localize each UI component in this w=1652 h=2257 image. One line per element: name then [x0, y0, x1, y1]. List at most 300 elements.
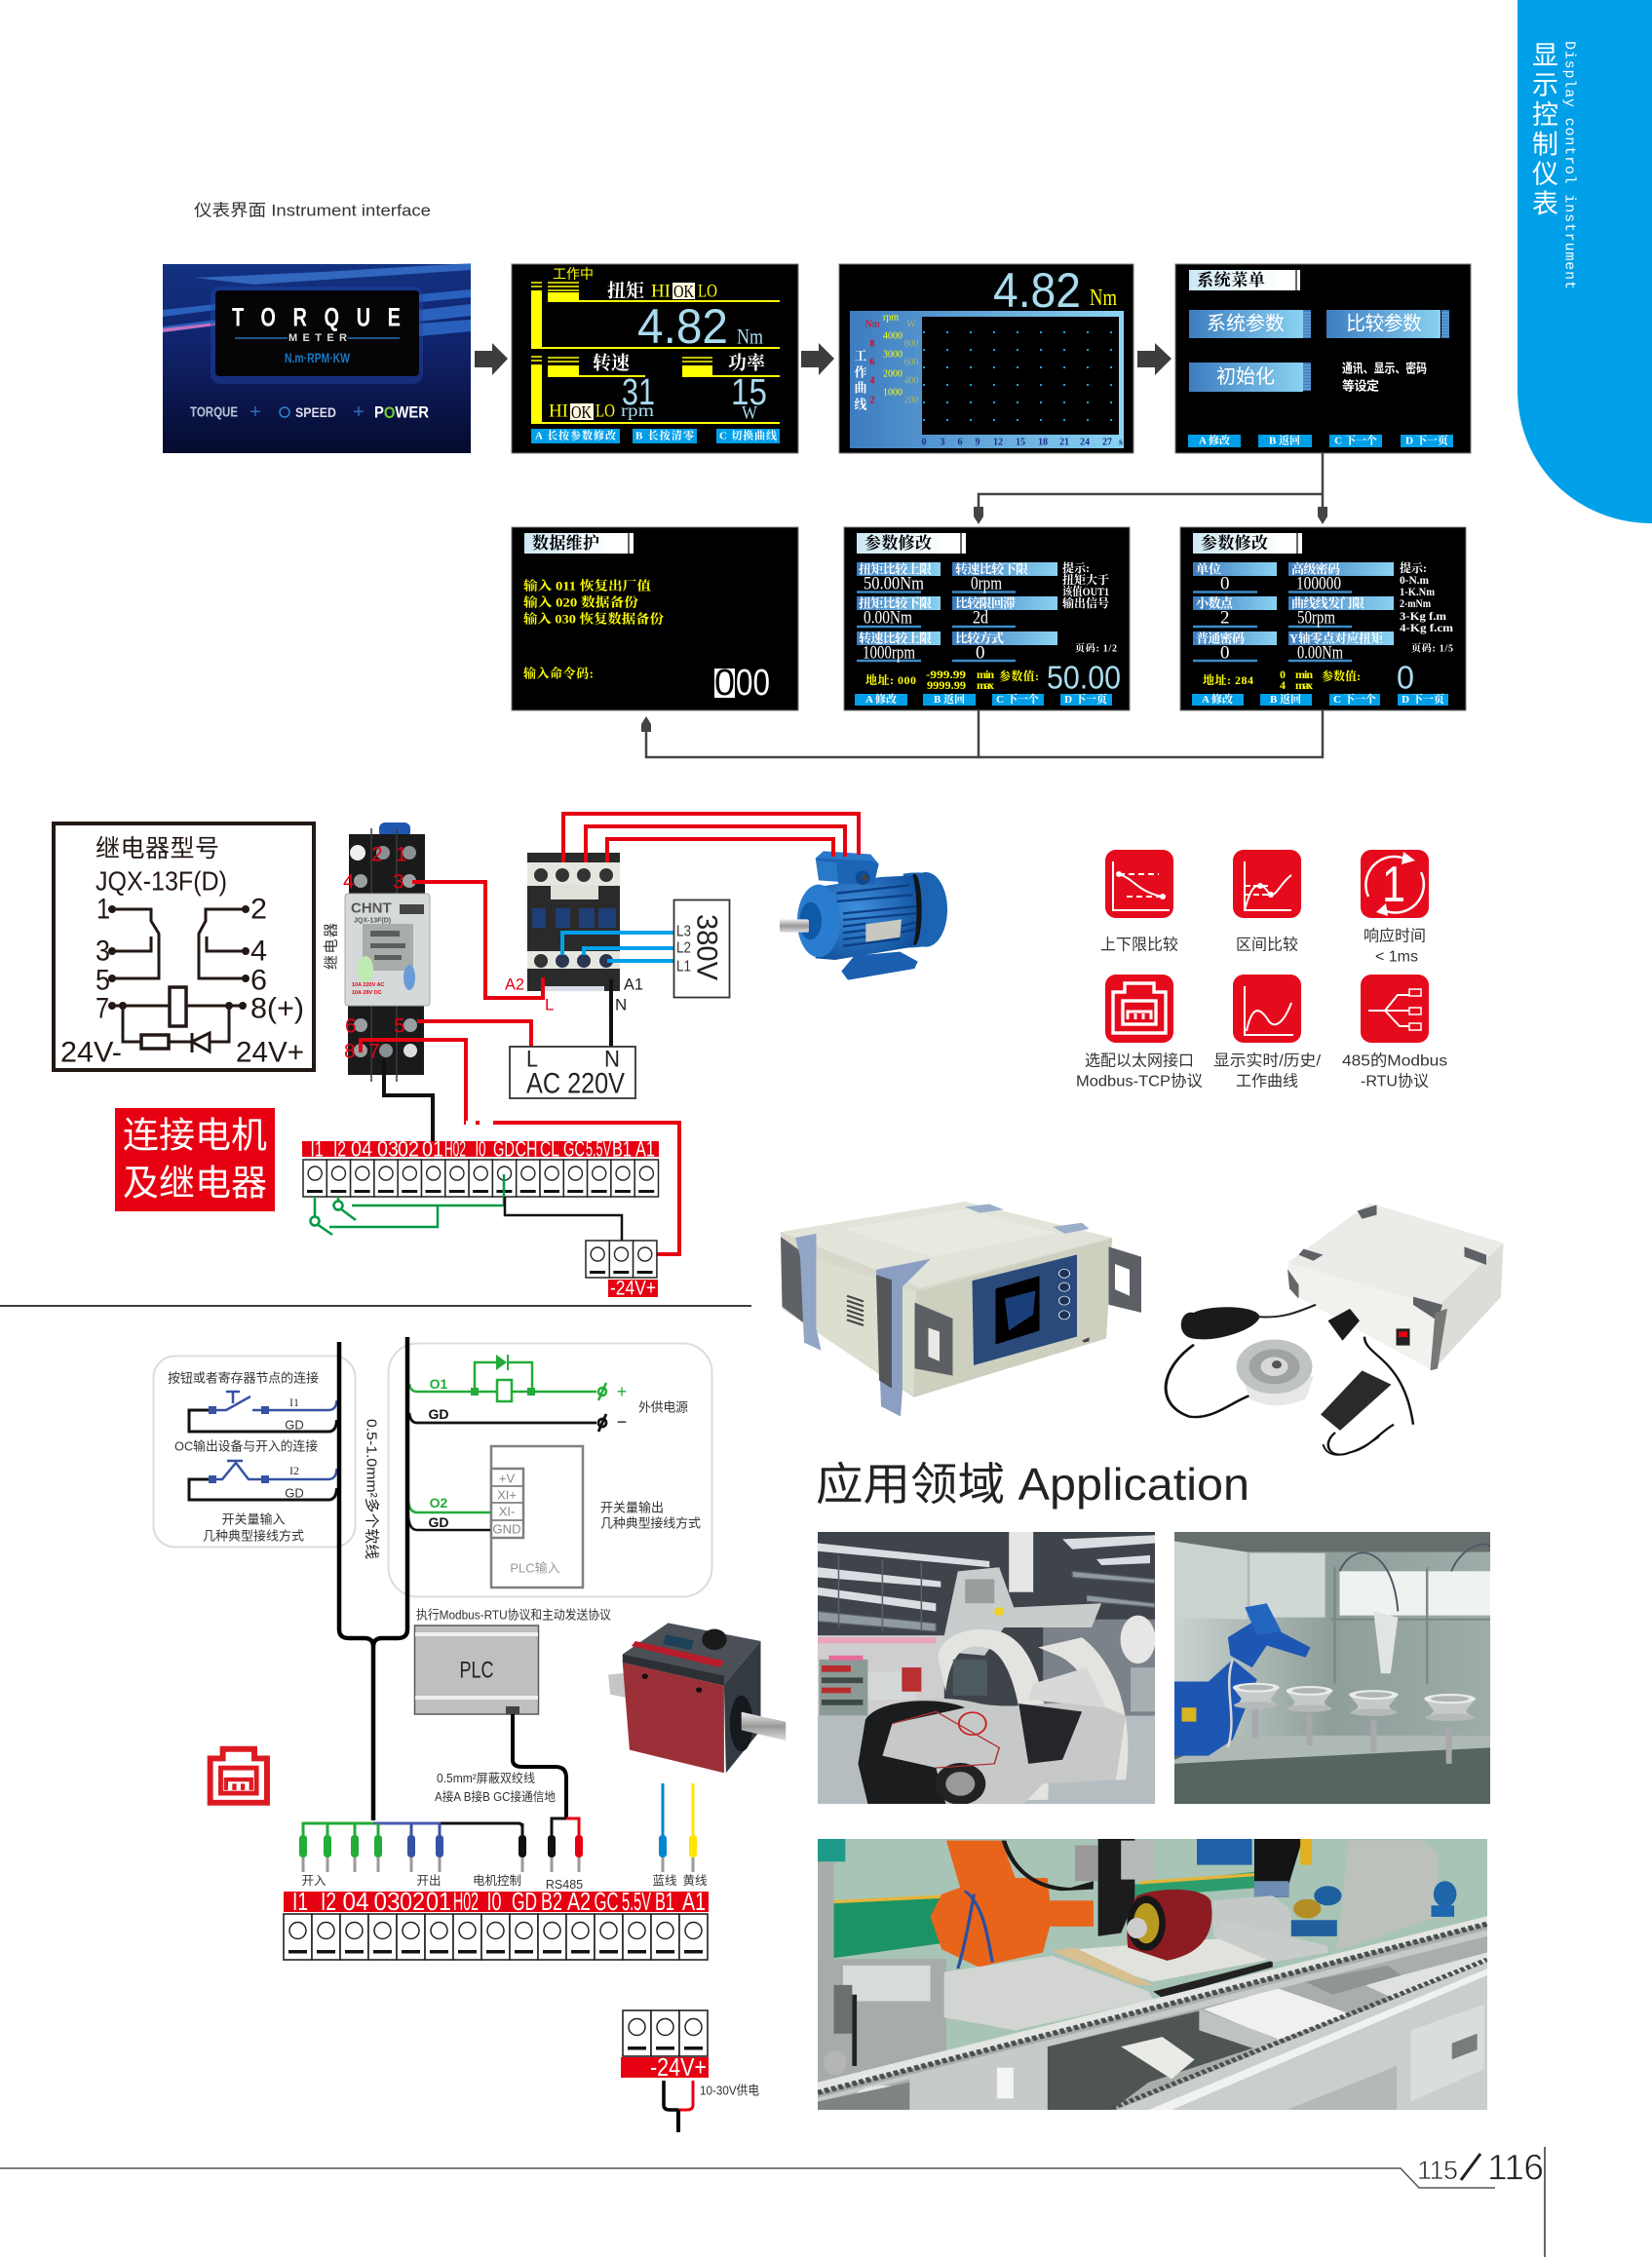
icon captions: 工作曲线	[1236, 1072, 1298, 1090]
photo: motor robot line	[818, 1839, 1487, 2110]
axis labels: 4	[869, 376, 875, 386]
icon: response time: 1	[1382, 857, 1405, 913]
screen: parameter edit page 5: 0-N.m	[1400, 573, 1429, 587]
terminal strip: motor wiring: CH	[515, 1136, 538, 1162]
relay photo: 6	[345, 1015, 357, 1037]
PLC unit	[415, 1626, 538, 1714]
screen: main readout: OK	[673, 282, 694, 301]
screen: parameter edit page 1: 提示:	[1062, 560, 1090, 575]
probe captions: 黄线	[682, 1874, 708, 1888]
AC 220V box: N	[604, 1047, 620, 1072]
terminal strip: sensor wiring: 5.5V	[622, 1887, 651, 1916]
panel: switching output wiring: XI-	[499, 1505, 515, 1518]
screen: parameter edit page 1: B 返回	[934, 692, 965, 706]
screen: parameter edit page 1: 2d	[973, 608, 988, 628]
screen: data maintenance: 输入 011 恢复出厂值	[523, 579, 651, 593]
screen: parameter edit page 1: 转速比较下限	[955, 561, 1028, 577]
terminal strip: motor wiring: I0	[476, 1136, 485, 1162]
screen: parameter edit page 5: 2	[1220, 608, 1230, 628]
screen: parameter edit page 5: min	[1295, 668, 1313, 681]
output O1 load	[409, 1362, 606, 1401]
screen: main readout: W	[742, 403, 757, 423]
terminal block: 24V sensor section: -24V+	[650, 2052, 707, 2082]
screen: working curve	[839, 263, 1133, 453]
icon: rs485 branches	[1361, 975, 1429, 1043]
panel: switching input wiring: I2	[289, 1464, 299, 1477]
380V supply box	[674, 900, 729, 998]
screen: main readout: C 切换曲线	[719, 429, 777, 442]
screen: parameter edit page 1: 地址: 000	[865, 672, 916, 687]
green switch inputs	[310, 1174, 504, 1235]
relay label: 继电器	[324, 923, 339, 970]
axis labels: 8	[869, 339, 875, 349]
screen: data maintenance: 数据维护	[532, 533, 599, 553]
screen: data maintenance: 输入 030 恢复数据备份	[523, 612, 664, 626]
torque row: 扭矩	[607, 281, 644, 302]
wires: three phase input	[562, 933, 675, 961]
panel: switching input wiring	[154, 1357, 355, 1548]
screen: parameter edit page 5: Y轴零点对应扭矩	[1289, 631, 1383, 645]
screen: main readout: Nm	[737, 324, 763, 349]
terminal strip: sensor wiring: I2	[321, 1887, 336, 1916]
screen: parameter edit page 5: 参数值:	[1322, 669, 1361, 683]
relay pinout box: 6	[250, 965, 267, 996]
screen: main readout: OK	[571, 402, 592, 422]
probe captions	[301, 1874, 708, 1892]
screen: parameter edit page 5: 小数点	[1196, 596, 1234, 610]
probe captions: RS485	[546, 1878, 583, 1892]
axis labels: 3000	[883, 349, 903, 361]
terminal strip: motor wiring: 5.5V	[586, 1136, 611, 1162]
icon captions: 上下限比较	[1100, 936, 1178, 953]
screen: data maintenance: 0	[714, 663, 735, 704]
screen: parameter edit page 5: C 下一个	[1333, 692, 1376, 706]
contactor terminal labels: L	[545, 996, 554, 1014]
screen: system menu: 通讯、显示、密码	[1342, 361, 1427, 376]
icon: realtime curve	[1233, 975, 1301, 1043]
axis labels	[854, 312, 1123, 448]
screen: parameter edit page 1: 扭矩大于	[1062, 572, 1109, 587]
screen: parameter edit page 5: 100000	[1296, 573, 1341, 594]
relay photo: 3	[393, 871, 404, 893]
front conveyor rail	[1116, 1963, 1487, 2110]
icon captions: 485的Modbus	[1342, 1052, 1447, 1070]
page number footer	[0, 2147, 1545, 2257]
screen: system menu: D 下一页	[1405, 433, 1448, 446]
panel: switching input wiring: I1	[289, 1396, 299, 1409]
380V supply box: 380V	[690, 914, 723, 980]
product photo: sensor kit	[1164, 1203, 1503, 1456]
screen: main readout: 31	[622, 372, 655, 413]
screen: main readout: HI	[651, 281, 671, 302]
icon: response time	[1361, 850, 1429, 918]
AC 220V box: AC 220V	[526, 1068, 625, 1099]
probe captions: 开出	[416, 1874, 442, 1888]
terminal strip: motor wiring: 04	[351, 1136, 372, 1162]
relay pinout box: 24V+	[236, 1037, 304, 1068]
contactor photo	[527, 853, 620, 991]
icon: range compare	[1233, 850, 1301, 918]
panel: switching output wiring: 开关量输出	[600, 1501, 664, 1514]
screen: main readout: HI	[549, 402, 568, 421]
relay photo: 7	[368, 1041, 380, 1062]
relay photo: 5	[394, 1015, 405, 1037]
side tab: section title: Display control instrument	[1561, 41, 1577, 289]
relay photo: JQX-13F(D)	[354, 918, 391, 924]
icon captions: 选配以太网接口	[1085, 1052, 1194, 1070]
terminal strip: motor wiring: GD	[493, 1136, 515, 1162]
screen: parameter edit page 1: A 修改	[865, 692, 897, 706]
screen: system menu	[1175, 264, 1471, 453]
screen: working curve: Nm	[1090, 286, 1117, 311]
panel: switching output wiring: GD	[429, 1514, 448, 1530]
icon: ethernet	[1105, 975, 1173, 1043]
panel: switching output wiring	[388, 1343, 711, 1596]
screen: system menu: A 修改	[1199, 433, 1230, 446]
screen: parameter edit page 5: D 下一页	[1402, 692, 1444, 706]
screen: parameter edit page 1: 1000rpm	[863, 643, 915, 663]
terminal strip: motor wiring: 02	[398, 1136, 419, 1162]
screen: parameter edit page 1: 比较限回滞	[955, 596, 1016, 610]
cable spec label: 0.5-1.0mm²多个软线	[363, 1419, 380, 1559]
between rails machinery	[938, 1924, 1487, 2110]
screen: torque meter splash: N.m·RPM·KW	[285, 350, 351, 365]
terminal strip: motor wiring: A1	[635, 1136, 655, 1162]
screen: main readout: 功率	[728, 353, 766, 374]
relay pinout box: 1	[96, 893, 110, 926]
axis labels: 1000	[883, 388, 903, 398]
relay photo: CHNT	[351, 900, 392, 916]
screen: main readout: LO	[595, 402, 615, 421]
screen: parameter edit page 1: -999.99	[926, 668, 966, 681]
screen: system menu: 比较参数	[1346, 312, 1422, 335]
panel: switching output wiring: −	[617, 1412, 627, 1432]
terminal strip: sensor wiring: I0	[487, 1887, 501, 1916]
screen: parameter edit page 5: 0	[1220, 573, 1230, 594]
screen: data maintenance: 输入 020 数据备份	[523, 594, 638, 610]
axis labels: 600	[904, 357, 918, 368]
axis labels: 工	[854, 349, 867, 363]
icon captions: -RTU协议	[1361, 1072, 1429, 1090]
main cable bundle	[339, 1337, 407, 1820]
relay photo: 4	[343, 871, 355, 893]
screen: main readout: LO	[698, 281, 717, 302]
panel: switching input wiring: 几种典型接线方式	[203, 1528, 304, 1544]
icon: upper lower limit compare	[1105, 850, 1173, 918]
axis labels: s	[1119, 437, 1123, 448]
icon captions	[1076, 926, 1447, 1090]
terminal strip: sensor wiring: 02	[400, 1887, 425, 1916]
connector arrows: menu to parameter screens	[974, 453, 1327, 524]
terminal strip: motor wiring	[302, 1136, 659, 1197]
photo: car assembly	[818, 1532, 1155, 1804]
panel: switching input wiring: OC输出设备与开入的连接	[174, 1438, 318, 1454]
terminal strip: sensor wiring: A2	[567, 1887, 591, 1916]
screen: parameter edit page 5: 0	[1397, 659, 1414, 696]
screen: parameter edit page 1: 页码: 1/2	[1075, 641, 1117, 655]
panel: switching output wiring: GD	[429, 1406, 448, 1422]
screen: parameter edit page 1	[844, 527, 1130, 710]
panel: switching output wiring: O1	[430, 1376, 448, 1392]
ground wire to 24V	[505, 1197, 622, 1254]
heading: application: 应用领域 Application	[816, 1459, 1249, 1510]
icon: ethernet port	[211, 1749, 267, 1803]
axis labels: 曲	[854, 380, 867, 396]
back conveyor rail	[818, 1916, 1487, 2092]
screen: system menu: 初始化	[1216, 365, 1275, 388]
arrow 3	[1137, 343, 1172, 375]
power leads	[664, 2081, 693, 2132]
screen: parameter edit page 5: 曲线线发门限	[1291, 596, 1364, 610]
relay pinout box: 2	[250, 893, 267, 926]
screen: torque meter splash: METER	[288, 332, 347, 344]
screen: torque meter splash: +	[353, 402, 365, 423]
axis labels: 27	[1102, 437, 1112, 448]
screen: parameter edit page 1: D 下一页	[1064, 692, 1107, 706]
screen: system menu: C 下一个	[1334, 433, 1377, 446]
terminal strip: sensor wiring: GD	[512, 1887, 537, 1916]
screen: parameter edit page 5: max	[1295, 678, 1313, 692]
badge: connect motor and relay: 及继电器	[123, 1164, 267, 1203]
badge: connect motor and relay	[115, 1108, 275, 1211]
axis labels: 200	[904, 396, 918, 405]
terminal block: 24V sensor section	[621, 2010, 709, 2082]
screen: torque meter splash: SPEED	[295, 404, 336, 420]
supply voltage note: 10-30V供电	[700, 2084, 759, 2097]
axis labels: 4000	[883, 331, 903, 341]
screen: parameter edit page 1: 输出信号	[1062, 595, 1109, 610]
relay photo	[343, 822, 430, 1082]
contactor terminal labels: A1	[624, 975, 643, 994]
screen: system menu: 系统菜单	[1197, 270, 1265, 289]
screen: torque meter splash	[163, 263, 471, 453]
icon captions: < 1ms	[1375, 949, 1418, 965]
380V supply box: L2	[676, 939, 691, 957]
screen: parameter edit page 5: 页码: 1/5	[1411, 641, 1453, 655]
icon captions: 显示实时/历史/	[1213, 1052, 1322, 1070]
axis labels: 9	[975, 437, 980, 448]
screen: main readout: rpm	[621, 401, 654, 420]
probe captions: 蓝线	[652, 1874, 677, 1888]
side tab: section title	[1518, 0, 1652, 523]
terminal strip: motor wiring: GC	[563, 1136, 585, 1162]
terminal strip: sensor wiring: GC	[595, 1887, 618, 1916]
arrow 1	[475, 343, 508, 375]
terminal strip: motor wiring: B1	[612, 1136, 632, 1162]
screen: torque meter splash: +	[250, 402, 261, 423]
relay pinout box: 4	[250, 936, 267, 967]
axis labels: 18	[1038, 437, 1048, 448]
feature icons	[1076, 850, 1447, 1090]
speed and power: 转速	[593, 353, 631, 374]
relay photo: 8	[344, 1041, 356, 1062]
screen: parameter edit page 1: 该值OUT1	[1062, 584, 1109, 598]
relay pinout box: 3	[96, 936, 110, 967]
screen: parameter edit page 1: 0	[976, 643, 984, 663]
screen: parameter edit page 5: 2-mNm	[1400, 596, 1431, 610]
terminal strip: sensor wiring: 04	[343, 1887, 368, 1916]
380V supply box: L3	[676, 924, 691, 939]
terminal strip: motor wiring: 01	[422, 1136, 443, 1162]
screen: torque meter splash: POWER	[374, 403, 429, 421]
soft keys	[531, 429, 620, 443]
shielded cable note	[435, 1771, 556, 1804]
axis labels: 0	[922, 437, 926, 448]
wires: neutral and relay coil	[384, 979, 611, 1142]
screen: main readout: 15	[731, 372, 767, 413]
terminal strip: sensor wiring: 03	[374, 1887, 400, 1916]
working status: 工作中	[553, 266, 594, 282]
terminal block: 24V motor section: -24V+	[610, 1277, 656, 1300]
RS485 cable	[513, 1714, 566, 1818]
screen: main readout: 4.82	[637, 299, 728, 354]
product photo: controller box	[781, 1202, 1141, 1417]
terminal strip: sensor wiring: H02	[453, 1887, 479, 1916]
torque sensor photo	[608, 1623, 786, 1774]
screen: parameter edit page 5: 提示:	[1400, 560, 1427, 575]
screen: parameter edit page 5: 单位	[1196, 561, 1221, 577]
relay pinout box: 5	[96, 965, 110, 996]
terminal strip: sensor wiring: 01	[426, 1887, 451, 1916]
relay pinout box: 继电器型号	[96, 835, 219, 862]
terminal strip: sensor wiring: I1	[292, 1887, 308, 1916]
screen: parameter edit page 1: 扭矩比较下限	[859, 596, 932, 610]
panel: switching output wiring: +V	[499, 1472, 515, 1485]
PLC protocol caption: 执行Modbus-RTU协议和主动发送协议	[416, 1608, 611, 1622]
relay pinout box: 8(+)	[250, 992, 304, 1025]
panel: switching output wiring: 几种典型接线方式	[600, 1516, 701, 1530]
screen: parameter edit page 1: 50.00Nm	[864, 573, 924, 594]
return arrow to data maintenance	[641, 710, 1323, 757]
screen: parameter edit page 1: 0.00Nm	[864, 608, 912, 628]
section divider	[0, 1305, 751, 1307]
contactor terminal labels	[505, 975, 643, 1014]
terminal strip: motor wiring: H02	[444, 1136, 466, 1162]
axis labels: W	[906, 320, 916, 329]
axis labels: 24	[1080, 437, 1090, 448]
relay photo: 10A 220V AC	[352, 982, 385, 988]
screen: parameter edit page 5: 3-Kg f.m	[1400, 609, 1446, 623]
axis labels: rpm	[883, 312, 899, 324]
terminal strip: sensor wiring: B1	[655, 1887, 674, 1916]
axis labels: 2000	[883, 368, 903, 380]
panel: switching output wiring: O2	[430, 1495, 448, 1511]
screen: parameter edit page 5: 参数修改	[1201, 533, 1268, 553]
axis labels: 400	[904, 376, 918, 386]
relay pinout box: 7	[96, 992, 109, 1025]
wires: relay to contactor and power	[361, 814, 859, 1254]
terminal strip: motor wiring: CL	[540, 1136, 559, 1162]
screen: parameter edit page 1: 50.00	[1047, 659, 1121, 696]
screen: parameter edit page 5: 地址: 284	[1203, 672, 1253, 687]
terminal strip: sensor wiring	[284, 1887, 709, 1960]
terminal strip: sensor wiring: B2	[541, 1887, 562, 1916]
screen: data maintenance: 00	[736, 663, 770, 704]
axis labels: 6	[957, 437, 963, 448]
axis labels: 6	[869, 357, 875, 368]
PLC unit: PLC	[460, 1657, 493, 1684]
terminal strip: sensor wiring: A1	[682, 1887, 706, 1916]
open collector wiring	[189, 1461, 337, 1500]
axis labels: 3	[940, 437, 945, 448]
panel: switching output wiring: XI+	[497, 1487, 517, 1503]
axis labels: 2	[869, 396, 875, 405]
icon captions: Modbus-TCP协议	[1076, 1072, 1203, 1090]
heading: instrument interface: 仪表界面 Instrument interface	[194, 201, 431, 220]
panel: switching output wiring: PLC输入	[510, 1561, 560, 1575]
screen: parameter edit page 1: 扭矩比较上限	[859, 561, 932, 577]
screen: data maintenance	[512, 527, 798, 710]
screen: parameter edit page 1: 转速比较上限	[859, 631, 932, 645]
probe captions: 电机控制	[473, 1874, 521, 1888]
screen: system menu: 等设定	[1342, 378, 1379, 394]
screen: data maintenance: 输入命令码:	[523, 667, 594, 680]
screen: parameter edit page 5: 1-K.Nm	[1400, 585, 1435, 598]
screen: parameter edit page 5: 0.00Nm	[1297, 643, 1343, 663]
screen: parameter edit page 5: 4-Kg f.cm	[1400, 621, 1453, 634]
screen: working curve: 4.82	[993, 263, 1081, 318]
probe captions: 开入	[301, 1874, 327, 1888]
side tab: section title: 显示控制仪表	[1528, 41, 1557, 219]
panel: switching output wiring: GND	[493, 1522, 520, 1536]
screen: main readout: B 长按清零	[635, 429, 694, 442]
axis labels: 15	[1016, 437, 1025, 448]
screen: parameter edit page 5: 高级密码	[1291, 561, 1340, 577]
relay photo: 1	[396, 844, 407, 865]
screen: torque meter splash: TORQUE	[190, 403, 238, 421]
screen: parameter edit page 5: 4	[1280, 678, 1286, 692]
axis labels: 800	[904, 339, 918, 349]
page number footer: 115	[1417, 2156, 1458, 2185]
screen: system menu: 系统参数	[1207, 312, 1285, 335]
page number footer: 116	[1487, 2148, 1544, 2187]
AC 220V box: L	[526, 1047, 538, 1072]
screen: parameter edit page 5: 0	[1220, 643, 1230, 663]
screen: parameter edit page 1: 0rpm	[971, 573, 1002, 594]
axis labels: 作	[854, 364, 867, 380]
screen: parameter edit page 1: 比较方式	[955, 631, 1004, 645]
380V supply box: L1	[676, 959, 691, 975]
screen: system menu: B 返回	[1269, 433, 1300, 446]
icon captions: 区间比较	[1236, 936, 1298, 953]
axis labels: 12	[993, 437, 1003, 448]
contactor terminal labels: A2	[505, 975, 524, 994]
axis labels: 线	[854, 398, 867, 411]
relay pinout box	[54, 823, 314, 1070]
PLC input box	[491, 1446, 583, 1588]
shielded cable note: 0.5mm²屏蔽双绞线	[437, 1771, 535, 1785]
axis labels: Nm	[865, 320, 880, 329]
screen: parameter edit page 5: A 修改	[1202, 692, 1233, 706]
screen: parameter edit page 5: B 返回	[1270, 692, 1301, 706]
photo: wheel painting robot	[1174, 1532, 1490, 1804]
screen: parameter edit page 5: 普通密码	[1196, 631, 1245, 645]
panel: switching output wiring: 外供电源	[638, 1399, 688, 1415]
screen: parameter edit page 1: 参数修改	[864, 533, 932, 553]
terminal strip: motor wiring: I1	[310, 1136, 324, 1162]
shielded cable note: A接A B接B GC接通信地	[435, 1789, 556, 1804]
axis labels: 21	[1059, 437, 1069, 448]
panel: switching input wiring: GD	[285, 1485, 304, 1501]
panel: switching input wiring: GD	[285, 1417, 304, 1433]
probe harness	[299, 1783, 697, 1872]
relay photo: 10A 28V DC	[352, 990, 382, 996]
screen: parameter edit page 5	[1180, 527, 1466, 710]
screen: main readout: A 长按参数修改	[535, 429, 616, 442]
AC 220V box	[510, 1047, 635, 1099]
relay pinout box: JQX-13F(D)	[96, 865, 227, 897]
screen: parameter edit page 1: 9999.99	[927, 678, 966, 692]
